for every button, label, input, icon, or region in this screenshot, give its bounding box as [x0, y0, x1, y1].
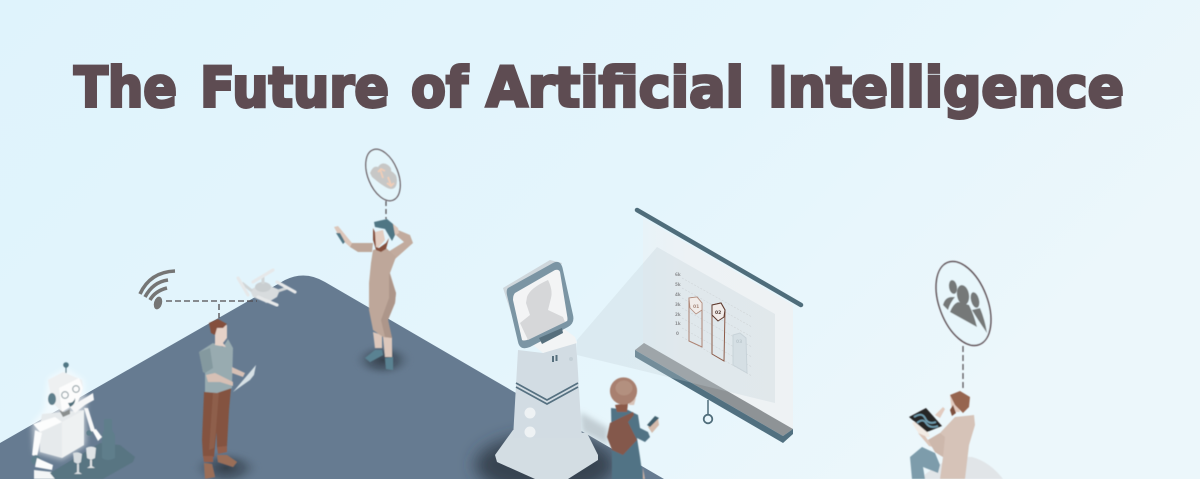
sleeve: [199, 348, 213, 373]
title: Artificial: [486, 56, 744, 120]
screen frame: [507, 262, 573, 348]
tablet waves: [914, 415, 938, 427]
chart: [675, 272, 752, 376]
bar 02: 02: [715, 310, 721, 316]
left arm: [350, 243, 373, 252]
screen panel: [643, 218, 793, 430]
backpack: [607, 412, 637, 455]
top cap: [533, 328, 577, 353]
left hand: [31, 455, 41, 465]
title: [74, 56, 1124, 120]
figure: student with backpack: [607, 377, 659, 479]
pointing hand: [935, 407, 945, 418]
torso: [928, 415, 975, 479]
hair tail: [615, 403, 628, 412]
neck: [59, 409, 70, 417]
hair: [950, 391, 970, 413]
axis labels: 0: [676, 331, 679, 336]
head: [215, 325, 227, 347]
hair: [209, 319, 227, 335]
right arm: [84, 408, 95, 432]
kiosk shadow on floor: [475, 435, 615, 479]
head: [48, 372, 83, 412]
shirt: [199, 339, 233, 393]
halo: [32, 368, 86, 460]
floor platform: [0, 275, 664, 479]
legs: [910, 447, 940, 479]
forearms: [206, 373, 233, 386]
body: [611, 408, 650, 479]
gridlines: [682, 278, 752, 376]
wine glass left: [73, 452, 82, 474]
hat: [374, 219, 395, 241]
projector screen: [635, 210, 801, 443]
raised arm: [388, 230, 413, 259]
shadow: [352, 342, 414, 378]
title: Intelligence: [768, 56, 1124, 120]
figure: man with tablet: [190, 319, 262, 479]
hair: [373, 228, 389, 252]
figure: robot waiter: [31, 362, 135, 479]
face: [950, 396, 960, 412]
axis labels: 4k: [675, 292, 681, 297]
icon: wifi: [140, 271, 175, 310]
figure: seated man reading tablet: [909, 254, 1003, 479]
forearm: [35, 458, 53, 470]
phone: [647, 416, 659, 427]
face: [375, 230, 385, 248]
axis labels: 2k: [675, 312, 681, 317]
icon circle: cloud: [359, 144, 407, 206]
face: [59, 378, 83, 412]
trousers: [202, 388, 231, 457]
connector: wifi to drone: [166, 301, 257, 318]
hand: [648, 418, 659, 433]
screen: [513, 270, 568, 340]
leg skin strip: [643, 468, 645, 479]
icon: people: [943, 279, 987, 333]
axis labels: 1k: [675, 321, 681, 326]
left upper arm: [32, 430, 42, 457]
book: [912, 420, 930, 437]
icon: drone: [238, 270, 295, 305]
bar 01: 01: [693, 304, 699, 310]
cuffs: [203, 446, 227, 462]
axis labels: 5k: [675, 282, 681, 287]
wine glass right: [86, 446, 96, 468]
base: [495, 430, 598, 479]
dress: [369, 247, 396, 338]
column: [513, 340, 582, 438]
hand arm: [918, 433, 933, 447]
figure: telepresence kiosk robot: [495, 260, 598, 479]
icon: cloud: [370, 163, 397, 189]
pull ring: [707, 400, 709, 414]
ear: [48, 393, 56, 405]
head: [610, 377, 637, 405]
kiosk shadow off floor: [580, 412, 608, 445]
title: of: [411, 56, 469, 120]
neck hinge: [539, 328, 563, 344]
tablet: [909, 408, 942, 432]
torso: [40, 410, 84, 458]
shoes: [365, 350, 393, 370]
bands: [516, 383, 578, 404]
axis labels: [675, 272, 681, 336]
axis labels: 6k: [675, 272, 681, 277]
bottle: [102, 419, 115, 460]
buttons: [524, 408, 536, 418]
connector: [385, 201, 387, 219]
top bar: [637, 210, 801, 305]
hand on hat: [392, 223, 399, 236]
shoes: [217, 455, 237, 467]
lower body: [34, 470, 55, 479]
left shoulder: [33, 417, 62, 432]
tablet: [233, 365, 256, 392]
face silhouette: [520, 280, 565, 340]
people icon circle: [925, 254, 1002, 353]
tray: [50, 443, 135, 479]
face: [629, 398, 636, 405]
phone: [336, 233, 345, 244]
shadow: [190, 449, 262, 479]
cloud arrows: [378, 169, 394, 186]
antenna: [65, 366, 67, 373]
bar 03: 03: [736, 339, 742, 345]
axis labels: 3k: [675, 302, 681, 307]
title: Future: [200, 56, 389, 120]
legs: [373, 332, 392, 357]
bottom bar: [635, 343, 793, 436]
title: The: [74, 56, 177, 120]
stool: [920, 457, 1003, 479]
projection beam: [577, 247, 775, 403]
figure: woman with phone and hat: [334, 144, 414, 378]
connector: [962, 346, 964, 388]
eyes: [62, 392, 68, 398]
screen backing: [503, 260, 562, 347]
right shoulder: [70, 393, 94, 413]
beard: [950, 405, 956, 416]
mouth: [68, 398, 75, 407]
